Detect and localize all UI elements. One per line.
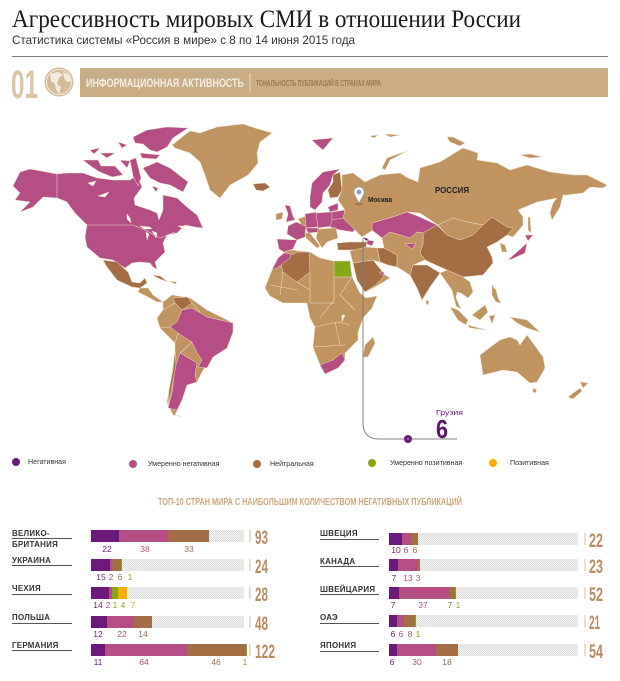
legend: Негативная [28, 458, 66, 466]
row: Sweden: 6 [404, 545, 409, 555]
row: United Kingdom: 33 [184, 544, 194, 554]
band background [80, 68, 608, 97]
legend: Позитивная [510, 459, 549, 467]
row: Germany: 1 [243, 657, 248, 667]
Middle East and Central Asia [337, 232, 425, 292]
row: Ukraine: 24 [255, 557, 268, 578]
row: UAE [320, 613, 600, 639]
row: UAE: 6 [391, 629, 396, 639]
row: Switzerland: 37 [418, 600, 428, 610]
row: Canada: 3 [416, 573, 421, 583]
row: Sweden: 6 [413, 545, 418, 555]
row: Switzerland: ШВЕЙЦАРИЯ [320, 585, 375, 594]
row: Japan: 18 [442, 657, 452, 667]
callout label: Грузия [436, 408, 463, 417]
row: United Kingdom: 22 [102, 544, 112, 554]
row: Poland [12, 613, 268, 639]
row: Canada: КАНАДА [320, 557, 355, 566]
row: Poland: 22 [117, 629, 127, 639]
China [420, 217, 513, 277]
row: Germany: ГЕРМАНИЯ [12, 641, 59, 650]
Russia [338, 148, 607, 237]
Brazil [170, 308, 233, 368]
row: Poland: 14 [138, 629, 148, 639]
callout value: 6 [436, 414, 448, 444]
Mexico [103, 260, 147, 288]
row: Germany: 122 [255, 642, 275, 663]
row: Czech Republic: 7 [131, 600, 136, 610]
subtitle: Статистика системы «Россия в мире» с 8 по 14 июня 2015 года [12, 33, 355, 47]
row: Japan [320, 641, 603, 667]
Chile [168, 350, 176, 405]
map label: Russia: РОССИЯ [435, 185, 469, 195]
row: Germany: 11 [94, 657, 103, 667]
row: United Kingdom [12, 528, 268, 554]
row: Ukraine: 1 [128, 572, 133, 582]
Russian Arctic islands [370, 134, 542, 233]
South America [157, 295, 233, 417]
row: Canada [320, 557, 603, 583]
callout dot [404, 435, 412, 443]
lakes and borders of North America [57, 174, 190, 240]
row: UAE: 1 [416, 629, 421, 639]
row: Ukraine [12, 556, 268, 582]
row: Ukraine: 6 [118, 572, 123, 582]
bar chart: right column [320, 529, 603, 667]
row: Sweden [320, 529, 603, 555]
India [410, 265, 440, 300]
row: Czech Republic: 2 [106, 600, 111, 610]
row: Switzerland: 7 [391, 600, 396, 610]
legend: Умеренно позитивная [390, 459, 462, 467]
row: Canada: 13 [403, 573, 413, 583]
row: Canada: 7 [392, 573, 397, 583]
row: United Kingdom: 93 [255, 528, 268, 549]
icon: globe [44, 68, 74, 96]
row: Sweden: ШВЕЦИЯ [320, 529, 358, 538]
row: Czech Republic [12, 584, 268, 610]
row: UAE: 8 [408, 629, 413, 639]
Iceland [253, 183, 270, 191]
chart heading: ТОП-10 СТРАН МИРА С НАИБОЛЬШИМ КОЛИЧЕСТВОМ НЕГАТИВНЫХ ПУБЛИКАЦИЙ [158, 495, 462, 508]
row: United Kingdom: 38 [140, 544, 150, 554]
row: Czech Republic: 4 [121, 600, 126, 610]
section number: 01 [11, 63, 38, 107]
row: Switzerland: 52 [589, 585, 603, 606]
world map [13, 124, 607, 417]
section header band [11, 63, 608, 107]
Central America and Caribbean [138, 275, 177, 302]
Madagascar [363, 337, 375, 357]
Algeria [281, 252, 310, 282]
Kazakhstan [372, 212, 437, 238]
Africa [265, 250, 377, 374]
row: Sweden: 22 [589, 531, 603, 552]
row: UAE: 6 [399, 629, 404, 639]
map label: Moscow: Москва [368, 195, 393, 204]
row: Switzerland: 7 [448, 600, 453, 610]
Japan [508, 235, 533, 260]
row: UAE: ОАЭ [320, 613, 338, 622]
Australia and New Zealand [480, 335, 588, 399]
row: Switzerland [320, 585, 603, 610]
band subheading: ТОНАЛЬНОСТЬ ПУБЛИКАЦИЙ В СТРАНАХ МИРА [256, 77, 381, 88]
row: Czech Republic: ЧЕХИЯ [12, 584, 41, 593]
row: Ukraine: УКРАИНА [12, 556, 51, 565]
Egypt [334, 261, 352, 277]
row: Japan: ЯПОНИЯ [320, 641, 356, 650]
Greenland [172, 124, 272, 198]
row: Japan: 6 [390, 657, 395, 667]
South Africa [320, 353, 345, 374]
row: Japan: 30 [412, 657, 422, 667]
row: Czech Republic: 1 [113, 600, 118, 610]
row: Germany [12, 641, 275, 667]
row: United Kingdom: ВЕЛИКО- [12, 529, 50, 538]
callout: Georgia [363, 238, 463, 444]
row: Sweden: 10 [391, 545, 401, 555]
legend: Умеренно негативная [148, 460, 220, 468]
Europe [276, 138, 358, 252]
row: Germany: 64 [139, 657, 149, 667]
Argentina [168, 353, 197, 410]
row: Poland: 48 [255, 614, 268, 635]
title: Агрессивность мировых СМИ в отношении России [12, 6, 521, 33]
row: Poland: ПОЛЬША [12, 613, 50, 622]
Mongolia [438, 218, 483, 240]
legend: Нейтральная [270, 460, 314, 468]
row: Czech Republic: 28 [255, 585, 268, 606]
row: Poland: 12 [93, 629, 103, 639]
row: Canada: 23 [589, 557, 603, 578]
row: Switzerland: 1 [456, 600, 461, 610]
row: Ukraine: 15 [96, 572, 106, 582]
row: Japan: 54 [589, 642, 603, 663]
bar chart: left column [12, 528, 275, 667]
row: Ukraine: 2 [109, 572, 114, 582]
Morocco [272, 253, 291, 270]
row: Czech Republic: 14 [93, 600, 103, 610]
band heading: ИНФОРМАЦИОННАЯ АКТИВНОСТЬ [86, 78, 244, 90]
legend [12, 458, 549, 468]
row: Germany: 46 [211, 657, 221, 667]
Moscow pin [354, 187, 364, 206]
North America: Canada and USA [13, 127, 203, 269]
row: UAE: 21 [589, 613, 600, 634]
row: United Kingdom: БРИТАНИЯ [12, 540, 58, 549]
Venezuela [173, 297, 192, 310]
South-East Asia and islands [426, 243, 540, 332]
